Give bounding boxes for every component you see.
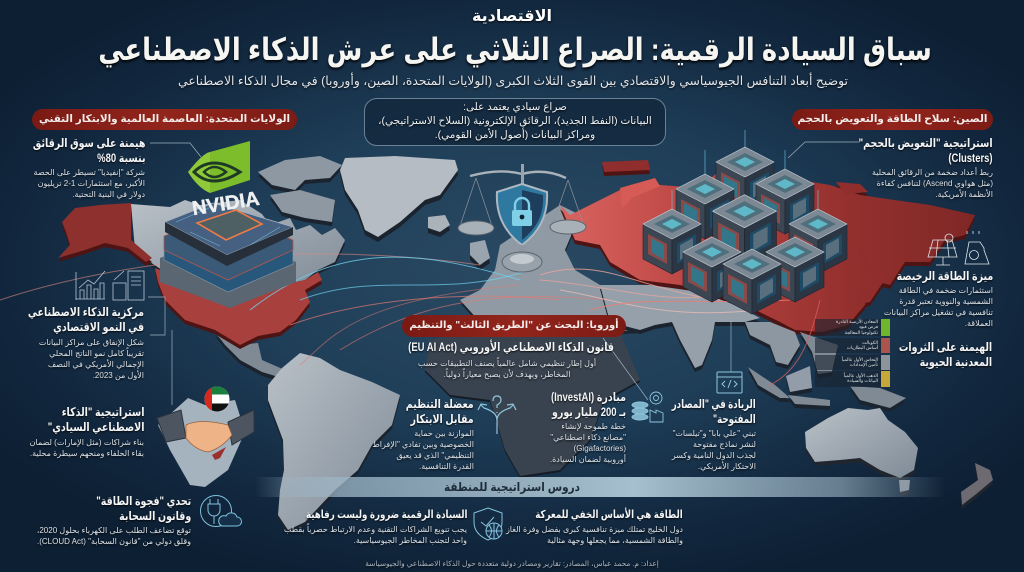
text block: chip dominance: الأكبر، مع استثمارات 1-2 تريليون (38, 179, 145, 188)
icon: NVIDIA chip stack (160, 203, 296, 308)
legend row 2: الكوبالت (862, 340, 878, 345)
text block: minerals: المعدنية الحيوية (919, 354, 992, 368)
icon: shield globe (474, 508, 502, 540)
text block: China clusters: (Clusters) (949, 150, 993, 164)
text block: EU AI Act: أول إطار تنظيمي شامل عالمياً يصنف التطبيقات حسب (418, 358, 596, 368)
text block: InvestAI: أوروبية لضمان السيادة. (550, 455, 626, 464)
callout: sovereign conflict (364, 98, 666, 146)
text block: chip dominance (32, 136, 146, 200)
text block: AI in economic growth: تقريباً كامل نمو الناتج المحلي (49, 349, 144, 358)
icon: charts and server (76, 271, 144, 300)
text block: InvestAI: (Gigafactories) (574, 444, 626, 453)
icon: Gulf handshake (157, 386, 254, 487)
icon: plug and cloud (200, 496, 242, 526)
legend row 3 (815, 355, 890, 370)
legend row 2 (815, 338, 890, 353)
panel heading: China: الصين: سلاح الطاقة والتعويض بالحجم (798, 114, 987, 125)
text block: cheap energy: العملاقة. (965, 318, 993, 328)
text block: InvestAI: خطة طموحة لإنشاء (561, 422, 626, 431)
text block: chip dominance: دولار في البنية التحتية. (72, 190, 145, 199)
text block: sovereign AI strategy (30, 405, 144, 460)
text block: energy foundation: الطاقة هي الأساس الخفي للمعركة (536, 509, 683, 521)
legend row 4 (815, 371, 890, 387)
text block: open source: لجذب الدول النامية وكسر (672, 451, 756, 460)
legend row 3: النحاس الأول عالمياً (842, 357, 878, 362)
text block: energy gap: توقع تضاعف الطلب على الكهرباء بحلول 2020، (37, 526, 191, 535)
band heading: دروس استراتيجية للمنطقة (444, 480, 580, 494)
legend row 1: تكنولوجيا المعالجة (845, 330, 878, 335)
text block: open source: الاحتكار الأمريكي. (698, 462, 756, 471)
text block: AI in economic growth: مركزية الذكاء الاصطناعي (28, 305, 144, 319)
text block: energy foundation: والطاقة الشمسية، مما يجعلها وجهة مثالية (547, 536, 683, 544)
legend row 1 (815, 319, 890, 336)
text block: sovereign AI strategy: الاصطناعي السيادي" (47, 420, 144, 434)
text block: chip dominance: بنسبة 80% (97, 150, 145, 164)
panel heading: Europe: أوروبا: البحث عن "الطريق الثالث" والتنظيم (409, 320, 619, 331)
text block: China clusters: الأنظمة الأمريكية. (935, 190, 993, 199)
text block: InvestAI: "مصانع ذكاء اصطناعي" (550, 433, 626, 442)
text block: energy gap: وقلق دولي من "قانون السحابة" (CLOUD Act). (37, 537, 191, 546)
legend row 2: أساس البطاريات (847, 345, 878, 350)
text block: regulation dilemma: الخصوصية وبين تفادي "الإفراط (372, 440, 474, 449)
legend: rare minerals table (815, 318, 890, 387)
panel heading: United States: الولايات المتحدة: العاصمة العالمية والابتكار التقني (39, 114, 290, 125)
icon: code window (717, 372, 742, 393)
text block: AI in economic growth: شكل الإنفاق على مراكز البيانات (39, 338, 144, 347)
icon: crossroads question mark (478, 396, 516, 434)
text block: open source: المفتوحة" (713, 412, 756, 426)
subtitle: توضيح أبعاد التنافس الجيوسياسي والاقتصادي بين القوى الثلاث الكبرى (الولايات المتحدة، الصين، وأوروبا) في مجال الذكاء الاصطناعي (178, 74, 848, 88)
icon: China server cluster (643, 130, 847, 314)
text block: open source: لنشر نماذج مفتوحة (693, 440, 756, 449)
text block: sovereign AI strategy: استراتيجية "الذكاء (61, 405, 144, 419)
text block: EU AI Act: قانون الذكاء الاصطناعي الأوروبي (EU AI Act) (408, 340, 614, 354)
text block: digital sovereignty (284, 509, 468, 546)
text block: regulation dilemma: التنظيمي" الذي قد يعيق (396, 451, 474, 460)
text block: open source: الريادة في "المصادر (672, 397, 756, 411)
text block: China clusters: ربط أعداد ضخمة من الرقائق المحلية (872, 168, 993, 177)
text block: cheap energy: الشمسية والنووية تعتبر قدرة (899, 296, 993, 306)
text block: regulation dilemma: معضلة التنظيم (406, 397, 474, 411)
panel heading: China (792, 109, 993, 130)
text block: sovereign AI strategy: بناء شراكات (مثل الإمارات) لضمان (30, 438, 144, 447)
text block: InvestAI: بـ 200 مليار يورو (552, 404, 626, 418)
text block: AI in economic growth: الإجمالي الأمريكي في النصف (48, 360, 144, 369)
text block: minerals (898, 340, 992, 371)
map: North America (131, 156, 345, 378)
map: Russia and China (560, 160, 975, 332)
legend row 4: الذهب الأول عالمياً (844, 373, 878, 378)
panel heading: United States (32, 109, 297, 130)
text block: regulation dilemma (372, 397, 474, 472)
text block: InvestAI: مبادرة (InvestAI) (551, 390, 626, 404)
text block: AI in economic growth (28, 305, 144, 382)
text block: open source: تبني "علي بابا" و"تيلسات" (673, 429, 756, 438)
text block: AI in economic growth: الأول من 2023. (93, 371, 144, 380)
connector lines (148, 142, 860, 405)
text block: energy gap: وقانون السحابة (119, 508, 191, 522)
icon: scales and shield (458, 164, 586, 272)
legend row 3: تأمين الإمدادات (850, 362, 878, 367)
legend row 1: المعادن الأرضية النادرة (836, 319, 878, 324)
text block: cheap energy: تنافسية في تشغيل مراكز البيانات (884, 308, 993, 316)
text block: open source (670, 397, 756, 473)
text block: digital sovereignty: يجب تنويع الشراكات التقنية وعدم الارتباط حصرياً بقطب (284, 524, 467, 534)
icon: gears and database (632, 392, 663, 422)
text block: chip dominance: هيمنة على سوق الرقائق (32, 136, 145, 150)
callout: sovereign conflict: صراع سيادي يعتمد على: (463, 102, 567, 113)
text block: cheap energy: ميزة الطاقة الرخيصة (896, 269, 993, 283)
legend row 4: البيانات والسيادة (847, 378, 878, 383)
text block: chip dominance: شركة "إنفيديا" تسيطر على الحصة (34, 168, 145, 177)
text block: InvestAI (550, 390, 626, 466)
map: Africa (425, 332, 640, 476)
data network lines (0, 254, 820, 385)
text block: digital sovereignty: السيادة الرقمية ضرورة وليست رفاهية (305, 509, 467, 521)
text block: EU AI Act (408, 340, 614, 381)
panel heading: Europe (402, 315, 626, 337)
text block: regulation dilemma: الموازنة بين حماية (414, 429, 474, 438)
text block: minerals: الهيمنة على الثروات (899, 340, 992, 354)
text block: sovereign AI strategy: بقاء الحلفاء ومنحهم سيطرة محلية. (30, 449, 144, 458)
bottom band (255, 477, 945, 497)
logo: الاقتصادية (472, 8, 552, 25)
map: Australia and New Zealand (805, 408, 993, 505)
map: Europe (460, 205, 640, 335)
text block: China clusters: استراتيجية "التعويض بالحجم" (859, 136, 993, 150)
callout: sovereign conflict: البيانات (النفط الجديد)، الرقائق الإلكترونية (السلاح الاستراتيجي)، (378, 116, 652, 127)
text block: energy gap: تحدي "فجوة الطاقة" (96, 494, 191, 508)
text block: energy gap (37, 494, 192, 548)
text block: regulation dilemma: القدرة التنافسية. (419, 462, 474, 471)
text block: regulation dilemma: مقابل الابتكار (411, 412, 474, 426)
text block: cheap energy: استثمارات ضخمة في الطاقة (899, 286, 993, 294)
text block: cheap energy (884, 269, 994, 328)
map: South America (268, 353, 400, 530)
text block: energy foundation (506, 508, 683, 546)
text block: EU AI Act: المخاطر، ويهدف لأن يصبح معياراً دولياً. (444, 370, 570, 378)
footer credit: إعداد: م. محمد عباس، المصادر: تقارير ومصادر دولية متعددة حول الذكاء الاصطناعي والجيوسياسة (365, 559, 659, 568)
text block: AI in economic growth: في النمو الاقتصادي (53, 320, 144, 334)
icon: NVIDIA logo (188, 141, 261, 220)
map: South and Southeast Asia (600, 285, 906, 408)
text block: China clusters (858, 136, 994, 201)
text block: digital sovereignty: واحد لتجنب المخاطر الجيوسياسية. (354, 536, 467, 544)
icon: solar panel and nuclear plant (928, 231, 989, 265)
text block: energy foundation: دول الخليج تمتلك ميزة تنافسية كبرى بفضل وفرة الغاز (506, 524, 683, 534)
icon: NVIDIA logo: NVIDIA (191, 188, 261, 220)
map: Greenland and Iceland (340, 156, 490, 265)
legend row 1: فرض قيود (859, 324, 878, 329)
callout: sovereign conflict: ومراكز البيانات (أصول الأمن القومي). (435, 130, 595, 141)
world map (58, 156, 993, 530)
title: سباق السيادة الرقمية: الصراع الثلاثي على عرش الذكاء الاصطناعي (98, 32, 932, 67)
text block: China clusters: (مثل هواوي Ascend) لتنافس كفاءة (877, 179, 993, 188)
map: United States (58, 203, 322, 345)
